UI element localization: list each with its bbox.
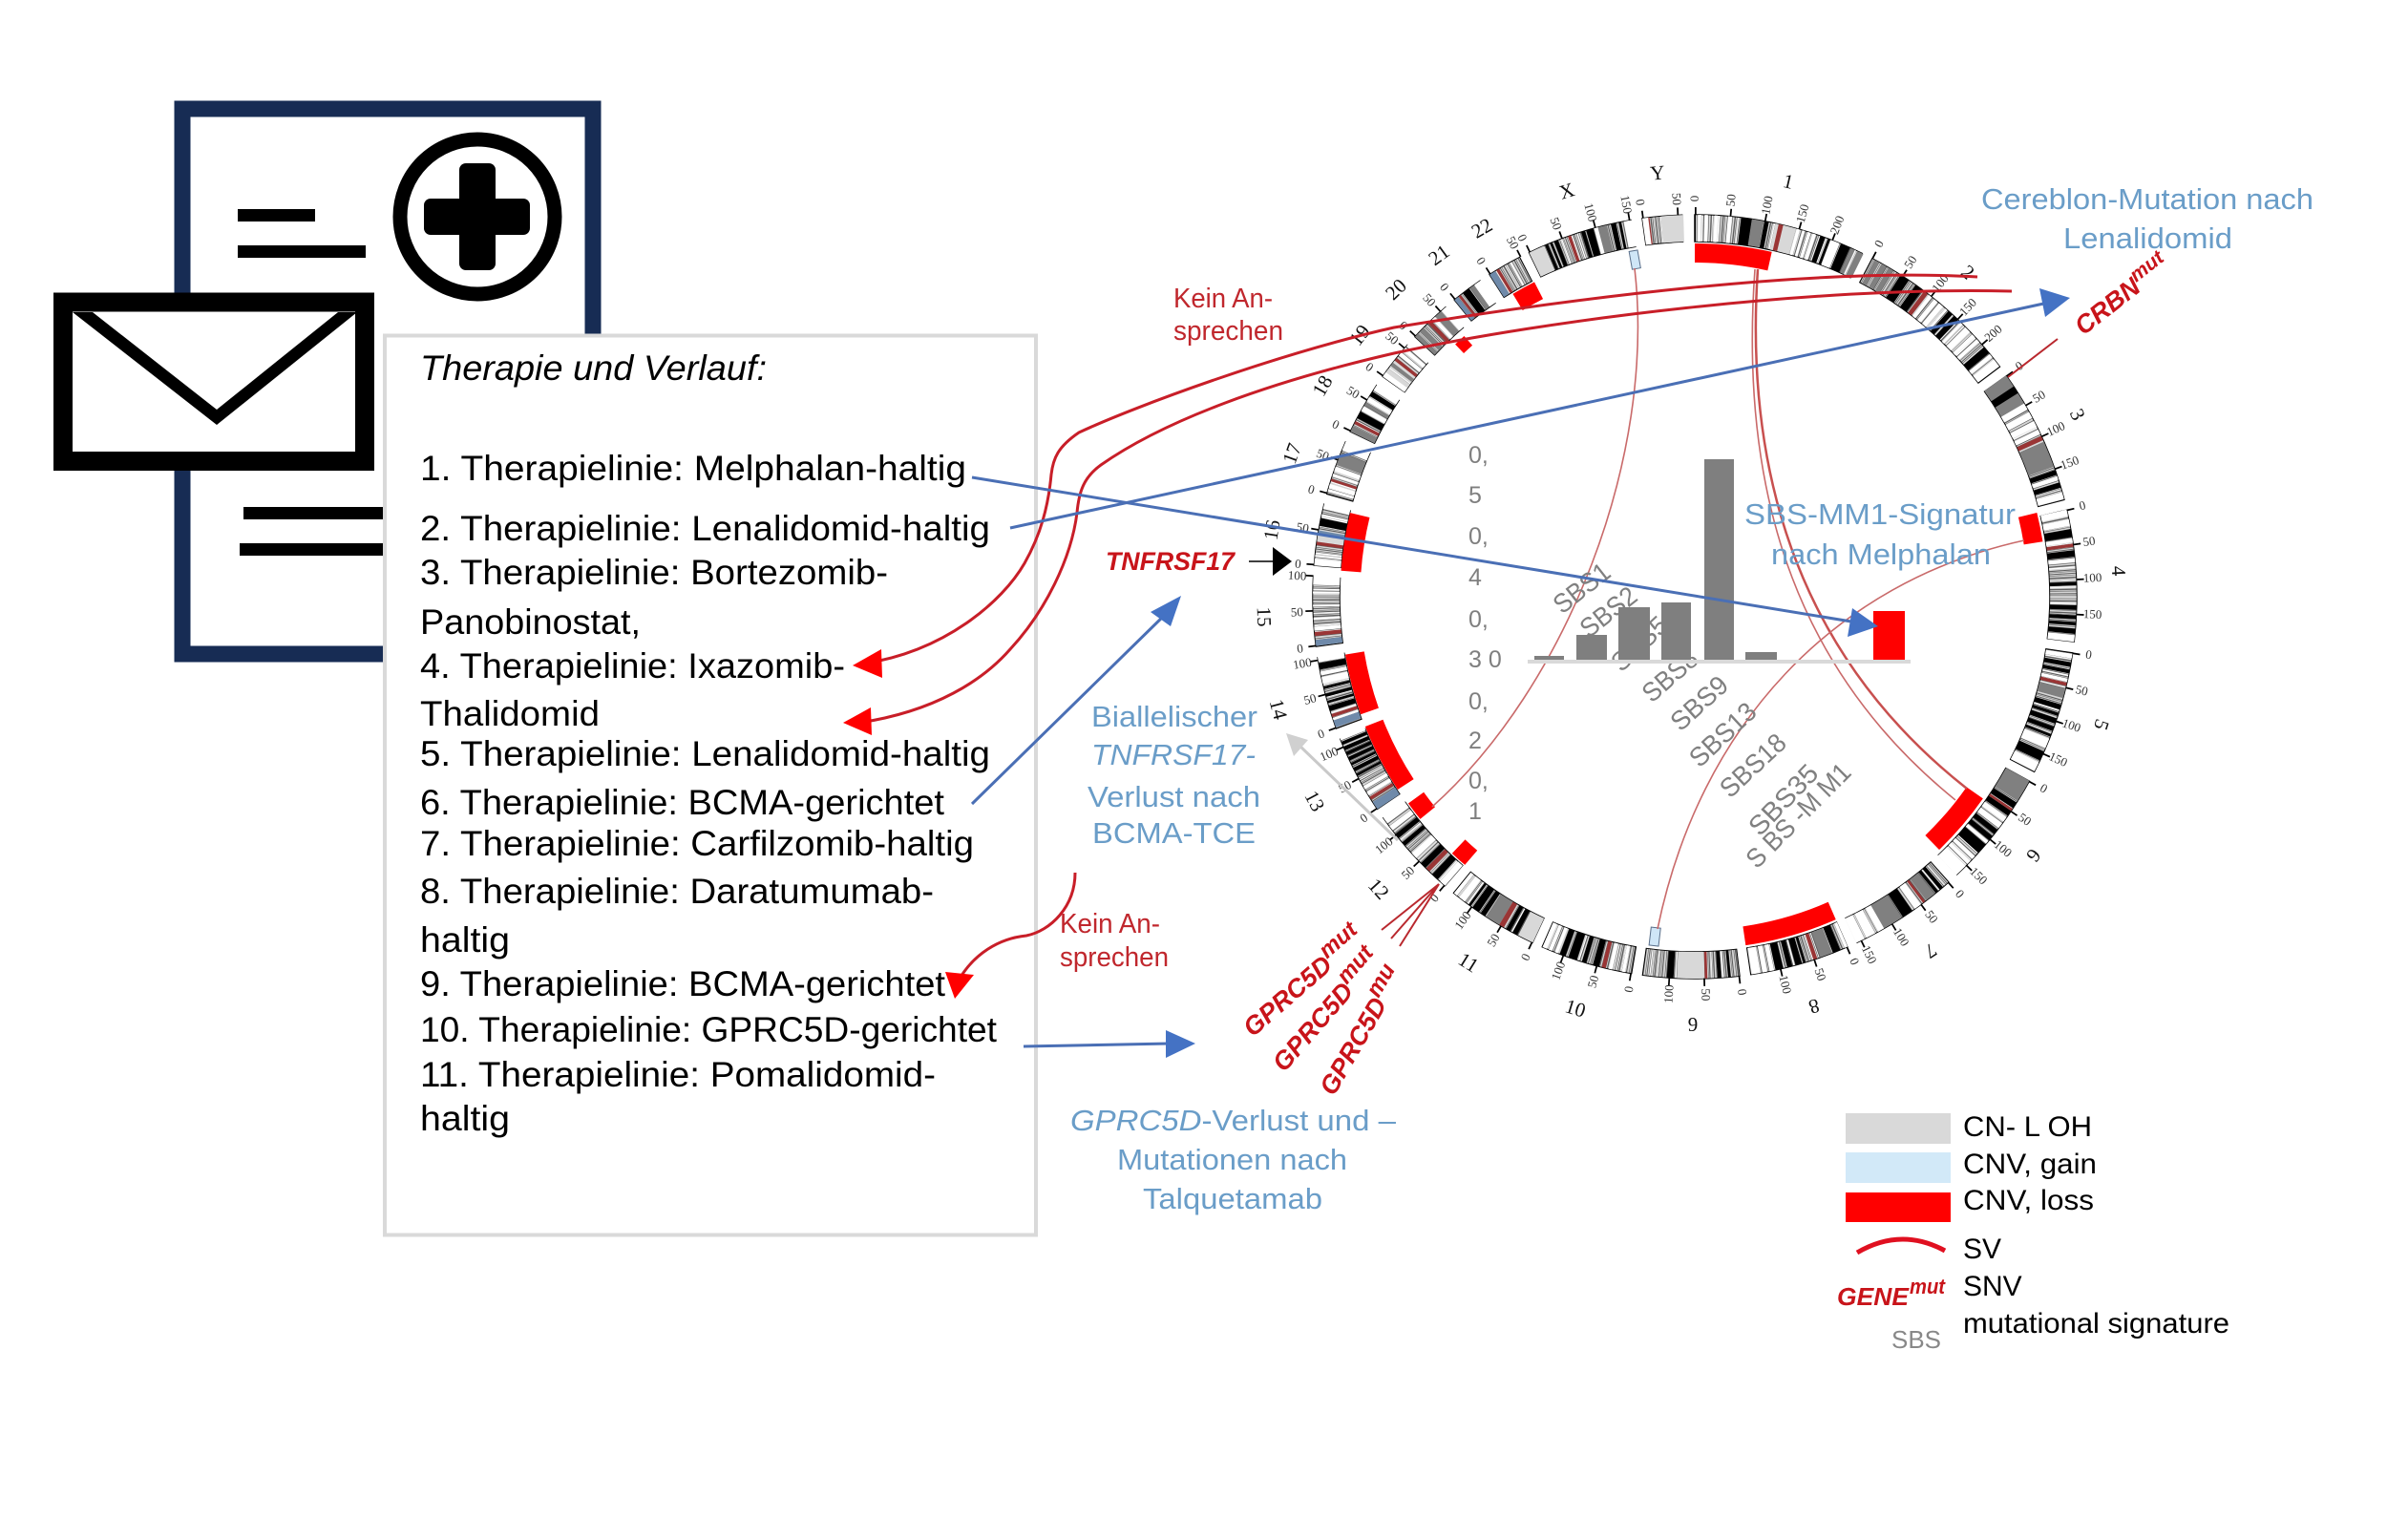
annotation: no response (bottom): Kein An- [1060, 909, 1160, 939]
chromosome 3: 0 [2013, 358, 2026, 373]
chromosome 1: 150 [1793, 202, 1812, 224]
chromosome 16: 0 [1295, 557, 1301, 571]
chromosome names: 8 [1806, 994, 1822, 1019]
chromosome names: 16 [1259, 518, 1284, 541]
list of therapy lines: Thalidomid [420, 694, 600, 733]
list of therapy lines: 8. Therapielinie: Daratumumab- [420, 872, 934, 911]
annotation: GPRC5D loss: Talquetamab [1143, 1182, 1322, 1215]
annotation: no response (bottom) [1060, 909, 1169, 973]
chromosome names: 19 [1344, 320, 1375, 350]
annotation: SBS-MM1 signature [1744, 497, 2016, 571]
bar chart axis labels: 5 [1468, 482, 1482, 509]
ring outline [1326, 228, 2063, 965]
arrow: GPRC5D to mutations [1024, 1030, 1195, 1058]
annotation: no response (top): Kein An- [1173, 284, 1273, 314]
chromosome 14 [1183, 101, 2190, 1098]
chromosome names [1253, 160, 2130, 1036]
chromosome 1: 200 [1827, 214, 1847, 236]
chromosome 1: 0 [1687, 196, 1701, 201]
chromosome names: 6 [2021, 844, 2046, 867]
annotation: no response (top): sprechen [1173, 316, 1283, 347]
bar chart axis labels: 2 [1468, 728, 1482, 754]
chromosome 1 [1309, 194, 2081, 982]
list of therapy lines: 4. Therapielinie: Ixazomib- [420, 646, 845, 686]
annotation: Cereblon mutation: Lenalidomid [2063, 222, 2232, 255]
chromosome 9: 100 [1660, 984, 1677, 1003]
chromosome names: 11 [1454, 947, 1483, 978]
list of therapy lines: 2. Therapielinie: Lenalidomid-haltig [420, 509, 990, 548]
chromosome 22: 0 [1473, 254, 1489, 267]
legend item: SV: SV [1963, 1234, 2001, 1265]
legend item: SNV: GENE [1837, 1282, 1910, 1311]
chromosome 1: 100 [1758, 195, 1776, 216]
chromosome names: 10 [1562, 994, 1589, 1023]
chromosome 11: 0 [1517, 951, 1533, 963]
list of therapy lines: 11. Therapielinie: Pomalidomid- [420, 1055, 936, 1094]
bar chart axis labels: 0, [1468, 523, 1489, 550]
chromosome 4: 100 [2082, 570, 2102, 585]
chromosome 12: 100 [1372, 833, 1396, 856]
list of therapy lines: 9. Therapielinie: BCMA-gerichtet [420, 964, 946, 1003]
bar chart axis labels: 0, [1468, 606, 1489, 633]
chromosome 19 [1143, 49, 2232, 1134]
chromosome 9 [1266, 168, 2125, 1043]
icon: medical document [182, 109, 593, 654]
chromosome X [1172, 66, 2209, 1111]
annotation: TNFRSF17 loss: Biallelischer [1091, 700, 1257, 733]
chromosome 16: 50 [1296, 519, 1310, 536]
list of therapy lines: haltig [420, 1099, 510, 1138]
legend item: mutational signature [1891, 1308, 2229, 1354]
panel: therapy list [385, 336, 1036, 1235]
chromosome names: X [1556, 178, 1577, 204]
list of therapy lines: 7. Therapielinie: Carfilzomib-haltig [420, 824, 974, 863]
chart: circos genome ring [1289, 193, 2102, 1002]
chromosome 15: 50 [1291, 604, 1303, 620]
chromosome 6 [1171, 73, 2234, 1129]
bar chart axis labels: 0, [1468, 688, 1489, 715]
chromosome names: 1 [1781, 169, 1796, 194]
chromosome 13: 0 [1357, 811, 1370, 826]
CNV loss segments [1210, 112, 2180, 1082]
list of therapy lines: 1. Therapielinie: Melphalan-haltig [420, 449, 966, 488]
chromosome 6: 0 [2038, 780, 2050, 796]
bar chart axis labels: 0, [1468, 442, 1489, 469]
legend item: CNV loss: CNV, loss [1963, 1185, 2094, 1216]
annotation: Cereblon mutation: Cereblon-Mutation nach [1981, 182, 2313, 216]
chromosome 11: 100 [1451, 908, 1474, 932]
chromosome 10: 0 [1621, 985, 1637, 994]
chromosome 22 [1152, 50, 2228, 1129]
icon: envelope [63, 302, 365, 461]
legend item: mutational signature: mutational signature [1963, 1308, 2229, 1340]
chromosome 14: 100 [1292, 655, 1313, 672]
legend [1837, 1111, 2229, 1354]
chromosome X: 0 [1514, 232, 1531, 243]
chromosome 8 [1187, 89, 2209, 1121]
chromosome 12 [1139, 53, 2239, 1154]
chromosome 8: 100 [1776, 974, 1795, 995]
chromosome names: 22 [1468, 213, 1496, 243]
chromosome names: 20 [1381, 274, 1411, 305]
legend item: SNV: SNV [1963, 1271, 2022, 1302]
annotation: SBS-MM1 signature: SBS-MM1-Signatur [1744, 497, 2016, 531]
CNV gain segments [1629, 250, 1660, 946]
legend item: CNV loss [1846, 1185, 2094, 1222]
chromosome 10: 50 [1584, 974, 1601, 989]
bar chart category labels: SBS1 [1548, 557, 1616, 620]
bar chart axis labels: 0, [1468, 768, 1489, 794]
gene label: TNFRSF17: TNFRSF17 [1106, 547, 1236, 576]
bar chart category labels: SBS2 [1574, 580, 1642, 643]
chromosome 18: 50 [1344, 383, 1362, 402]
chromosome 5: 50 [2074, 682, 2089, 699]
chromosome names: Y [1649, 160, 1666, 185]
chromosome 17: 0 [1306, 481, 1317, 496]
chromosome Y: 0 [1633, 199, 1648, 206]
chromosome names: 12 [1363, 874, 1394, 904]
gene pointer: CRBN [2008, 339, 2058, 377]
bar chart category labels: SBS9 [1664, 670, 1734, 736]
chromosome 16 [1261, 179, 2111, 1013]
chromosome 1: 50 [1723, 194, 1739, 207]
list of therapy lines [420, 449, 998, 1138]
chromosome names: 14 [1265, 697, 1292, 723]
gene label: GPRC5D 3: GPRC5D [1314, 993, 1392, 1100]
gene label: GPRC5D 2: GPRC5D [1267, 977, 1359, 1077]
chromosome 6: 150 [1967, 864, 1991, 887]
annotation: TNFRSF17 loss: Verlust nach [1088, 780, 1260, 813]
bar chart category labels: SBS18 [1714, 728, 1792, 803]
legend item: CNV gain: CNV, gain [1963, 1149, 2097, 1180]
annotation: SBS-MM1 signature: nach Melphalan [1771, 538, 1991, 571]
list of therapy lines: 3. Therapielinie: Bortezomib- [420, 553, 888, 592]
chromosome X: 150 [1617, 194, 1636, 215]
chromosome 12: 0 [1426, 891, 1442, 905]
chromosome 4: 150 [2083, 606, 2102, 622]
SV arcs inside ring [1432, 268, 2024, 929]
chromosome 22: 50 [1504, 234, 1522, 251]
list of therapy lines: 6. Therapielinie: BCMA-gerichtet [420, 783, 945, 822]
annotation: TNFRSF17 loss: TNFRSF17- [1091, 738, 1256, 771]
chromosome 20: 0 [1396, 318, 1410, 332]
annotation: no response (bottom): sprechen [1060, 942, 1169, 973]
gene label: GPRC5D 1: GPRC5D [1237, 950, 1338, 1043]
chromosome 3: 50 [2030, 387, 2048, 406]
gene pointers: GPRC5D [1382, 884, 1439, 946]
chromosome 2: 150 [1956, 295, 1979, 319]
chromosome 5: 150 [2047, 749, 2070, 770]
chromosome 14: 50 [1302, 690, 1318, 707]
annotation: TNFRSF17 loss [1088, 700, 1260, 850]
legend item: mutational signature: SBS [1891, 1325, 1941, 1354]
chromosome 17: 50 [1315, 446, 1331, 463]
chromosome 21: 0 [1437, 280, 1452, 294]
list of therapy lines: haltig [420, 920, 510, 960]
chromosome 5 [1257, 158, 2150, 1037]
chromosome 11 [1174, 84, 2207, 1126]
annotation: no response (top) [1173, 284, 1283, 347]
chromosome 3: 100 [2044, 418, 2067, 439]
chromosome names: 18 [1307, 371, 1338, 400]
chromosome X: 100 [1581, 201, 1600, 223]
chromosome 15: 100 [1287, 568, 1307, 583]
bar chart axis labels: 3 0 [1468, 646, 1502, 673]
chromosome 2: 100 [1929, 271, 1952, 295]
bar chart axis labels: 1 [1468, 798, 1482, 825]
chromosome 20: 50 [1420, 290, 1439, 309]
chromosome 11: 50 [1484, 931, 1503, 949]
chromosome 18 [1165, 74, 2209, 1111]
chromosome names: 9 [1688, 1013, 1698, 1036]
chromosome 13: 50 [1336, 777, 1354, 796]
chromosome 8: 0 [1847, 956, 1863, 967]
chromosome 3: 150 [2059, 453, 2081, 473]
bar chart category labels: SBS35 [1743, 758, 1825, 841]
chromosome 10: 100 [1549, 960, 1568, 981]
legend item: CNV gain [1846, 1149, 2097, 1183]
chromosome Y: 50 [1669, 193, 1684, 205]
arrow: TNFRSF17 marker [1249, 547, 1292, 576]
chromosome 21 [1143, 42, 2237, 1139]
list of therapy lines: Panobinostat, [420, 602, 641, 642]
chromosome 7 [1151, 53, 2251, 1154]
annotation: GPRC5D loss [1070, 1104, 1397, 1215]
chromosome 2: 0 [1871, 238, 1887, 250]
bar chart category labels: SBS5 [1605, 610, 1674, 677]
bar chart [1528, 459, 1911, 664]
chromosome 9: 50 [1699, 988, 1713, 1002]
chromosome 4: 50 [2081, 534, 2096, 549]
legend item: SV [1857, 1234, 2001, 1265]
chromosome 15 [1245, 164, 2127, 1032]
chromosome 8: 50 [1812, 966, 1829, 982]
heading: therapy and course: Therapie und Verlauf: [420, 348, 767, 388]
annotation: GPRC5D loss: Mutationen nach [1117, 1143, 1347, 1176]
chromosome 19: 0 [1363, 359, 1377, 374]
chromosome 7: 50 [1922, 907, 1941, 926]
gene label: GPRC5D 1: mut [1314, 916, 1363, 963]
bar chart category labels: SBS8 [1637, 643, 1704, 708]
chromosome 4 [1231, 129, 2176, 1061]
chromosome names: 4 [2107, 565, 2130, 577]
chromosome 2 [1174, 60, 2224, 1117]
chromosome 18: 0 [1330, 416, 1341, 432]
chromosome 19: 50 [1383, 328, 1402, 348]
chromosome 12: 50 [1399, 863, 1417, 882]
annotation: GPRC5D loss: GPRC5D -Verlust und – [1070, 1104, 1397, 1137]
arrow: chromosome 14 loss (grey) [1286, 733, 1398, 840]
chromosome 3 [1157, 49, 2247, 1134]
chromosome names: 15 [1253, 606, 1276, 627]
chromosome names: 5 [2089, 716, 2114, 733]
chromosome 15: 0 [1296, 641, 1304, 656]
chromosome names: 3 [2065, 405, 2090, 424]
chromosome 5: 0 [2084, 647, 2093, 662]
chromosome 9: 0 [1735, 988, 1750, 996]
bar chart axis labels [1468, 442, 1502, 825]
chromosome 5: 100 [2060, 715, 2082, 735]
chromosome 6: 100 [1992, 837, 2015, 860]
chromosome 2: 50 [1901, 253, 1920, 271]
chromosome 20 [1137, 40, 2240, 1142]
chromosome 2: 200 [1981, 322, 2005, 345]
chromosome 13: 100 [1318, 744, 1341, 764]
annotation: TNFRSF17 loss: BCMA-TCE [1092, 816, 1256, 850]
chromosome names: 7 [1920, 939, 1941, 963]
chromosome 14: 0 [1316, 726, 1326, 742]
chromosome names: 2 [1956, 260, 1979, 285]
list of therapy lines: 5. Therapielinie: Lenalidomid-haltig [420, 734, 990, 773]
chromosome 7: 0 [1953, 887, 1968, 900]
chromosome 10 [1248, 153, 2139, 1058]
red SV arrows to therapy list [843, 275, 2012, 999]
bar chart category labels [1548, 557, 1857, 874]
gene label: GPRC5D 3: mu [1362, 959, 1401, 1002]
list of therapy lines: 10. Therapielinie: GPRC5D-gerichtet [420, 1010, 998, 1049]
chromosome 7: 150 [1859, 943, 1880, 966]
legend item: SNV [1837, 1271, 2022, 1311]
arrow: Lenalidomid to CRBN [1010, 288, 2070, 528]
legend item: CN-LOH [1846, 1111, 2092, 1144]
chromosome 4: 0 [2078, 497, 2087, 513]
bar chart axis labels: 4 [1468, 564, 1482, 591]
arrow: Melphalan to SBS-MM1 [972, 477, 1878, 637]
gene label: CRBN: CRBN [2069, 272, 2145, 341]
annotation: Cereblon mutation [1981, 182, 2313, 255]
chromosome 13 [1145, 62, 2229, 1142]
chromosome 6: 50 [2016, 810, 2034, 829]
chromosome names: 13 [1299, 787, 1330, 815]
gene label: GPRC5D 2: mut [1332, 939, 1380, 989]
chromosome 17 [1203, 116, 2170, 1072]
chromosome names: 17 [1278, 440, 1306, 467]
bar chart category labels: SBS13 [1683, 696, 1763, 772]
arrow: BCMA to TNFRSF17 [972, 596, 1181, 804]
legend item: CN-LOH: CN- L OH [1963, 1111, 2092, 1143]
ring base with fine bands [1326, 228, 2063, 965]
bar chart category labels: S BS -M M1 [1740, 757, 1857, 874]
chromosome X: 50 [1547, 215, 1565, 232]
chromosome Y [1257, 144, 2130, 1032]
chromosome names: 21 [1424, 240, 1454, 270]
chromosome 7: 100 [1891, 925, 1912, 949]
gene label: CRBN: mut [2125, 246, 2169, 286]
legend item: SNV: mut [1910, 1275, 1947, 1298]
